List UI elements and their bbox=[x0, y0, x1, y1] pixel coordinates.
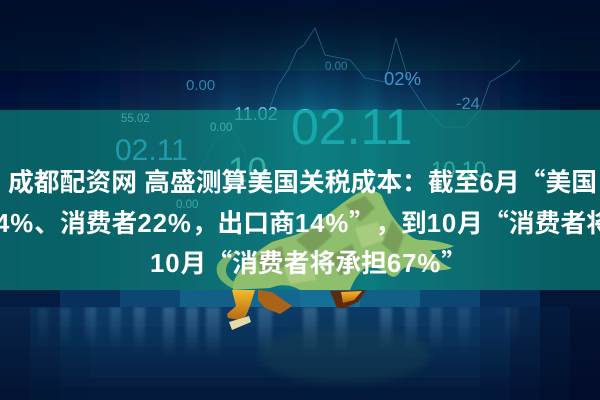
background market figures: 10.10 bbox=[431, 157, 486, 182]
background market figures: 10 bbox=[228, 151, 267, 190]
background market figures: 0.00 bbox=[325, 61, 347, 73]
bull front hooves bbox=[227, 290, 255, 320]
background market figures: 0.00 bbox=[186, 77, 215, 94]
title line 3: 10月“消费者将承担67%” bbox=[150, 243, 467, 280]
bar strip under band bbox=[0, 290, 600, 307]
bull body bbox=[233, 191, 454, 290]
background market figures: 02.11 bbox=[291, 99, 412, 155]
reflective floor bbox=[0, 307, 600, 400]
background market figures: 02% bbox=[384, 68, 421, 89]
market trend lines bbox=[200, 28, 520, 180]
background market figures: 02.11 bbox=[115, 134, 188, 167]
icon: bull sculpture bbox=[217, 191, 454, 330]
background market figures: 11.02 bbox=[234, 104, 278, 124]
background market figures: 55.02 bbox=[121, 113, 150, 125]
bull tail bbox=[217, 250, 245, 290]
teal translucent band bbox=[0, 110, 600, 290]
background market figures: -24 bbox=[456, 95, 480, 113]
title line 1: 成都配资网 高盛测算美国关税成本：截至6月“美国 bbox=[8, 162, 597, 199]
title: three centered clipped lines bbox=[0, 162, 600, 280]
bull rear hoof bbox=[330, 290, 366, 308]
background market figures bbox=[115, 61, 486, 211]
upper background with light curtains bbox=[0, 0, 600, 300]
background market figures: 0.00 bbox=[210, 122, 232, 134]
bull highlights bbox=[284, 222, 384, 284]
bull hide shading bbox=[256, 196, 404, 276]
background market figures: 0.00 bbox=[176, 199, 198, 211]
